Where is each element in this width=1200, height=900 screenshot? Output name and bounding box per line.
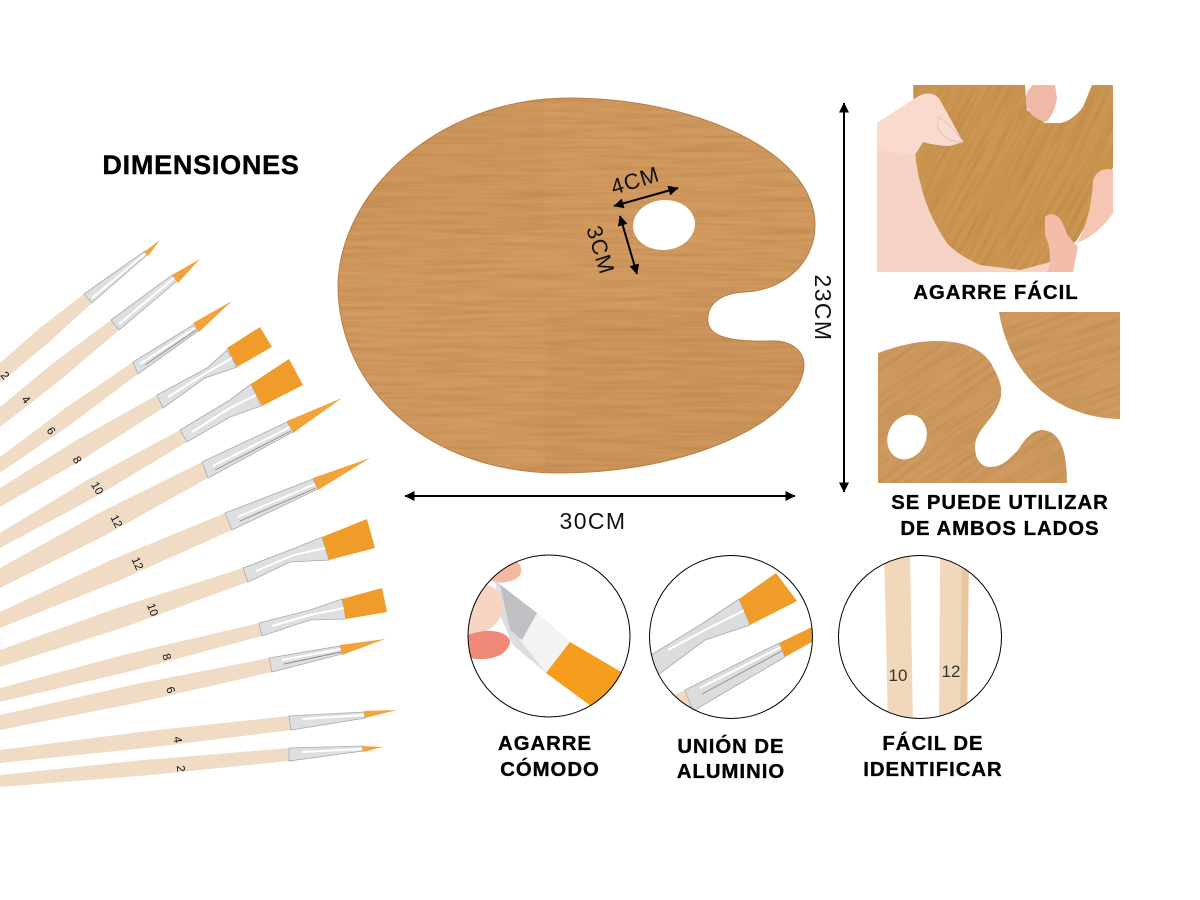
circle: comfortable grip	[468, 555, 630, 717]
caption: union de aluminio: ALUMINIO	[677, 761, 785, 783]
width dimension arrow	[405, 495, 795, 497]
brush 2 size 4	[0, 259, 200, 427]
brush 4 size 8: 8	[70, 455, 83, 466]
brush 2 size 4: 4	[19, 394, 32, 407]
heading: dimensiones: DIMENSIONES	[102, 150, 300, 180]
brush 4 size 8	[0, 327, 272, 507]
brush 1 size 2	[0, 240, 160, 383]
caption: union de aluminio: UNIÓN DE	[677, 734, 785, 758]
circle: easy to identify	[838, 550, 1002, 725]
brush 10 size 6: 6	[163, 686, 177, 695]
photo: palette both sides	[878, 312, 1120, 483]
height dimension arrow	[843, 103, 845, 492]
caption: facil de identificar: FÁCIL DE	[882, 732, 984, 755]
brush 11 size 4: 4	[171, 736, 183, 744]
brush 8 size 10	[0, 519, 375, 667]
width label: 30CM	[560, 508, 626, 534]
circle: easy to identify: 12	[942, 662, 960, 681]
circle: aluminium joint	[640, 556, 812, 725]
brush 11 size 4	[0, 710, 397, 763]
hole height arrow and label: 3CM	[581, 223, 620, 277]
brush 7 size 12	[0, 458, 370, 628]
hole height arrow and label	[581, 216, 637, 277]
brush 12 size 2: 2	[174, 765, 186, 772]
wooden palette	[330, 90, 830, 480]
brush 9 size 8: 8	[159, 652, 173, 662]
caption: se puede utilizar de ambos lados: DE AMBOS LADOS	[900, 518, 1100, 540]
caption: agarre comodo: AGARRE	[498, 733, 592, 755]
caption: se puede utilizar de ambos lados: SE PUEDE UTILIZAR	[891, 492, 1109, 514]
brush 3 size 6	[0, 301, 232, 473]
circle: easy to identify: 10	[889, 666, 907, 685]
brush 7 size 12: 12	[129, 555, 145, 572]
hole width arrow and label: 4CM	[608, 161, 662, 200]
brush 8 size 10: 10	[144, 602, 160, 618]
height label: 23CM	[810, 275, 836, 341]
caption: agarre facil: AGARRE FÁCIL	[913, 281, 1079, 304]
caption: facil de identificar: IDENTIFICAR	[863, 759, 1003, 781]
brush 5 size 10: 10	[88, 480, 105, 497]
brush 6 size 12: 12	[107, 513, 124, 530]
brush 6 size 12	[0, 398, 342, 588]
hole width arrow and label	[608, 161, 678, 206]
brush 5 size 10	[0, 359, 303, 548]
brush 9 size 8	[0, 588, 387, 702]
brush 12 size 2	[0, 746, 383, 787]
photo: hand holding palette	[877, 85, 1113, 272]
caption: agarre comodo: CÓMODO	[500, 757, 600, 781]
brush 3 size 6: 6	[44, 425, 57, 437]
brush 10 size 6	[0, 639, 385, 730]
